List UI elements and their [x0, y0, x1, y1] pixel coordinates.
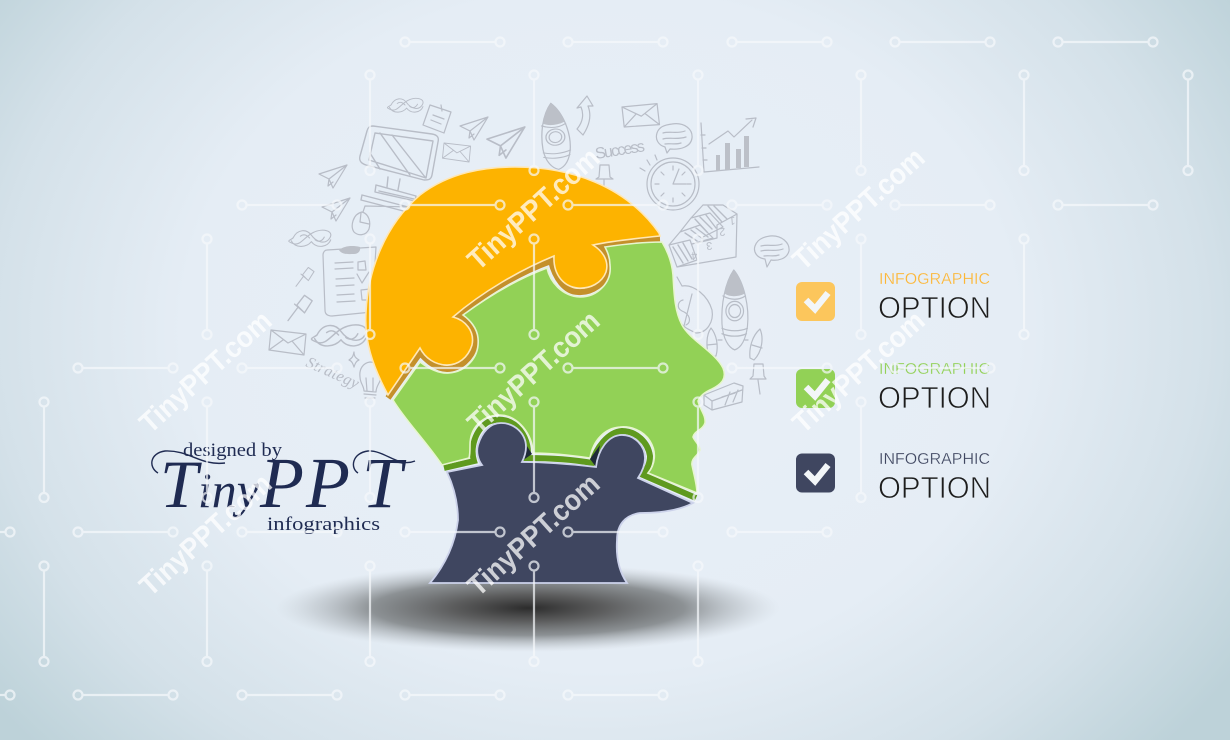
logo script: TinyPPT: T: [362, 443, 407, 523]
icon: envelope top right: [620, 100, 661, 132]
text: Success: Success: [594, 138, 646, 163]
seam shadows at navy shoulders: [522, 443, 600, 467]
icon: push pin large: [288, 295, 312, 321]
icon: stairs: [669, 205, 737, 267]
icon: navy checkbox: [796, 454, 835, 492]
navy puzzle piece: [430, 423, 693, 583]
logo text: infographics: infographics: [267, 514, 380, 535]
icon: push pin right: [750, 364, 766, 394]
icon: infinity left: [289, 230, 331, 246]
icon: growth chart: [701, 118, 759, 172]
logo script: TinyPPT: iny: [198, 462, 260, 518]
logo text: designed by: designed by: [183, 440, 283, 461]
icon: rocket fin right: [745, 329, 762, 360]
icon: rocket fin left: [707, 328, 722, 357]
icon: paper plane left: [319, 165, 347, 188]
option 3: [796, 451, 991, 505]
logo swashes: [152, 451, 415, 473]
icon: rocket right: [722, 270, 748, 350]
icon: stairs: 3: [706, 239, 713, 251]
watermark 2: TinyPPT.com: [462, 305, 606, 440]
label: option: OPTION: [878, 470, 991, 505]
icon: speech bubble: [656, 124, 692, 153]
watermark 1: TinyPPT.com: [462, 142, 606, 277]
watermark 3: TinyPPT.com: [462, 468, 606, 603]
label: infographic green: INFOGRAPHIC: [879, 361, 990, 378]
icon: note: [423, 105, 451, 133]
text: Strategy: Strategy: [303, 354, 362, 393]
icon: stairs: 2: [719, 225, 726, 237]
ground shadow: [276, 564, 780, 652]
doodle cluster behind head: [269, 96, 789, 410]
icon: box four: [704, 383, 743, 410]
icon: paper plane small: [460, 117, 488, 140]
label: infographic orange: INFOGRAPHIC: [879, 271, 990, 288]
icon: push pin small: [296, 267, 314, 286]
green puzzle piece: [393, 242, 724, 493]
label: option: OPTION: [878, 290, 991, 325]
icon: clock: [640, 155, 699, 210]
logo script: TinyPPT: P: [259, 443, 304, 523]
icon: envelope small: [442, 143, 471, 162]
icon: infinity large: [311, 325, 366, 346]
option 2: [796, 361, 991, 415]
icon: money bag: [677, 277, 712, 333]
icon: clipboard: [323, 246, 376, 316]
icon: stairs: 4: [691, 249, 698, 261]
label: infographic navy: INFOGRAPHIC: [879, 451, 990, 468]
icon: computer mouse: [352, 206, 414, 235]
head puzzle: [366, 167, 724, 583]
watermark 4: TinyPPT.com: [134, 305, 278, 440]
label: option: OPTION: [878, 380, 991, 415]
icon: curved arrow: [577, 96, 593, 135]
icon: star: [349, 352, 359, 367]
orange puzzle piece: [366, 167, 660, 395]
icon: paper plane second: [322, 198, 350, 221]
icon: paper plane large: [487, 127, 525, 158]
watermark 7: TinyPPT.com: [787, 305, 931, 440]
icon: rocket top: [538, 102, 573, 171]
watermark 6: TinyPPT.com: [787, 142, 931, 277]
logo: designed by TinyPPT infographics: [152, 440, 415, 535]
seam: orange to green: [388, 239, 660, 398]
icon: infinity top: [387, 98, 423, 112]
logo script: TinyPPT: T: [160, 446, 202, 522]
icon: green checkbox: [796, 369, 835, 408]
watermarks: [134, 142, 931, 603]
icon: monitor: [360, 126, 438, 213]
icon: envelope left: [269, 330, 306, 355]
option 1: [796, 271, 991, 325]
watermark 5: TinyPPT.com: [134, 468, 278, 603]
icon: light bulb: [360, 362, 381, 398]
legend options: [796, 271, 991, 505]
icon: push pin top: [596, 165, 613, 187]
logo script: TinyPPT: P: [305, 443, 350, 523]
icon: stairs: 1: [729, 214, 736, 226]
icon: speech bubble right: [754, 236, 789, 267]
icon: orange checkbox: [796, 282, 835, 321]
seam: green to navy: [444, 420, 696, 498]
